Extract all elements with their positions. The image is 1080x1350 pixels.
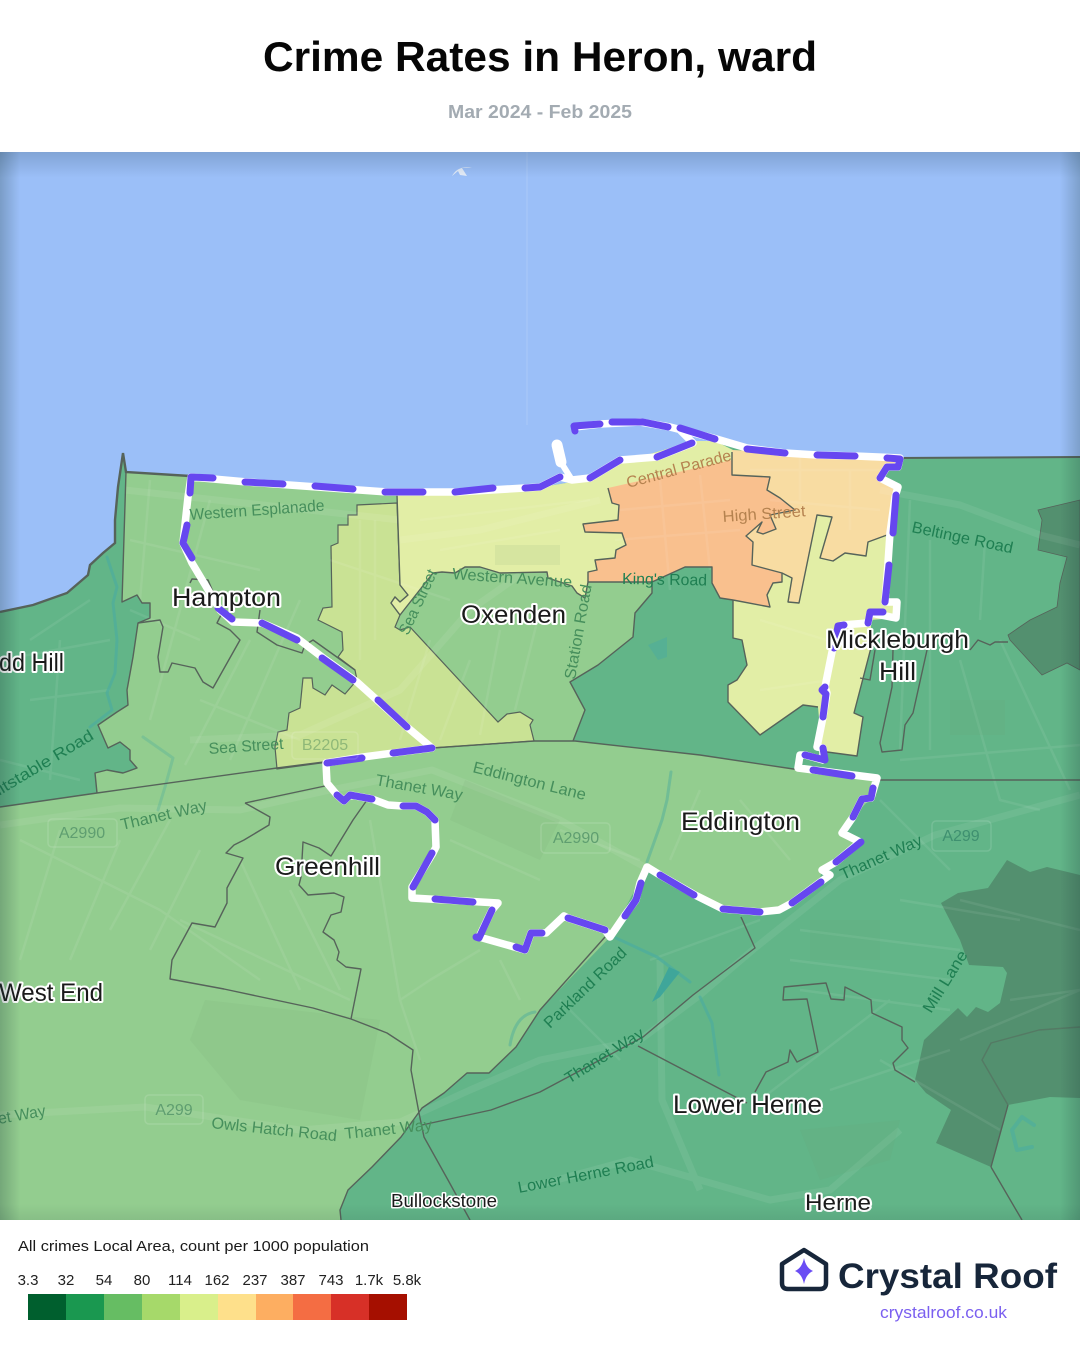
road shields: A2990 [59, 825, 105, 842]
legend scale values: 54 [96, 1272, 112, 1289]
place labels: Bullockstone [391, 1191, 497, 1211]
area: pale orange band [732, 450, 900, 603]
legend colour bar [28, 1294, 407, 1320]
road labels: Western Esplanade [189, 498, 325, 524]
map edge shading [0, 152, 1080, 1220]
area: orange high-crime centre [583, 460, 795, 607]
logo wordmark: Crystal Roof [838, 1257, 1057, 1296]
area: pale yellow east [728, 516, 893, 756]
place labels: Mickleburgh [826, 626, 969, 654]
place labels: Hill [879, 658, 916, 686]
darker field patches [495, 545, 560, 565]
land base: medium crime band [0, 441, 1080, 1220]
road labels: Thanet Way [374, 772, 464, 804]
area: light green north of the road [95, 472, 652, 793]
road labels: Sea Street [208, 736, 285, 758]
place labels: dd Hill [0, 649, 64, 677]
place labels: West End [0, 979, 103, 1007]
road shields: A299 [942, 828, 980, 845]
road labels: Beltinge Road [910, 519, 1014, 557]
subtitle: date range: Mar 2024 - Feb 2025 [448, 101, 632, 122]
road labels: Eddington Lane [471, 759, 588, 804]
road labels: Lower Herne Road [517, 1154, 655, 1197]
road labels: King's Road [622, 571, 707, 589]
road labels: Thanet Way [562, 1025, 647, 1087]
road shields: A299 [155, 1102, 193, 1119]
harbour arm [557, 445, 572, 480]
streets [0, 450, 1080, 1200]
place labels: Hampton [172, 584, 281, 612]
coastline [0, 453, 190, 612]
legend scale values: 162 [204, 1272, 230, 1289]
icon: boat [452, 167, 472, 176]
legend scale values: 5.8k [393, 1272, 422, 1289]
legend scale values: 237 [242, 1272, 268, 1289]
place labels: Greenhill [275, 853, 380, 881]
legend scale values: 32 [58, 1272, 74, 1289]
road labels: Central Parade [625, 447, 733, 492]
legend scale values: 80 [134, 1272, 150, 1289]
place labels: Oxenden [461, 601, 566, 629]
legend scale values: 387 [280, 1272, 306, 1289]
road labels: Thanet Way [344, 1117, 433, 1143]
legend scale values [18, 1272, 422, 1289]
road labels: Parkland Road [541, 945, 630, 1032]
place labels: Lower Herne [673, 1091, 822, 1119]
ward boundary: Heron white casing [183, 422, 900, 950]
ward boundary: Heron purple dashes [183, 422, 900, 950]
area: darker band north-east [1008, 500, 1080, 675]
road labels: Sea Street [396, 567, 441, 638]
road shields: B2205 [302, 737, 348, 754]
road labels: Owls Hatch Road [211, 1115, 338, 1145]
area: light green south of the road [0, 741, 875, 1220]
road labels: Mill Lane [920, 948, 972, 1016]
legend scale values: 3.3 [18, 1272, 38, 1289]
legend title: All crimes Local Area, count per 1000 population [18, 1238, 369, 1255]
road shields: A2990 [553, 830, 599, 847]
place labels [0, 584, 969, 1215]
road labels: Thanet Way [838, 832, 925, 884]
road shields [48, 732, 991, 1124]
road labels: Station Road [562, 583, 596, 681]
road labels: Western Avenue [452, 566, 573, 591]
place labels: Herne [805, 1190, 871, 1215]
title: Crime Rates in Heron, ward [263, 33, 817, 80]
area: lime band [275, 503, 534, 769]
icon: house with star [782, 1250, 826, 1289]
legend scale values: 114 [168, 1272, 192, 1289]
legend [18, 1238, 422, 1320]
panel: choropleth map [0, 152, 1080, 1220]
area: darker band south-east [915, 860, 1080, 1167]
area: pale yellow west [391, 441, 733, 615]
boundaries between local areas [0, 452, 1080, 1220]
logo: Crystal Roof [782, 1250, 1057, 1322]
legend scale values: 1.7k [355, 1272, 384, 1289]
place labels: Eddington [681, 808, 800, 836]
road labels [0, 447, 1014, 1197]
water: streams and ponds [90, 557, 1034, 1150]
logo url: crystalroof.co.uk [880, 1304, 1008, 1322]
road labels: Thanet Way [119, 798, 209, 834]
legend scale values: 743 [318, 1272, 344, 1289]
sea [0, 152, 1080, 632]
road labels: High Street [722, 503, 807, 526]
